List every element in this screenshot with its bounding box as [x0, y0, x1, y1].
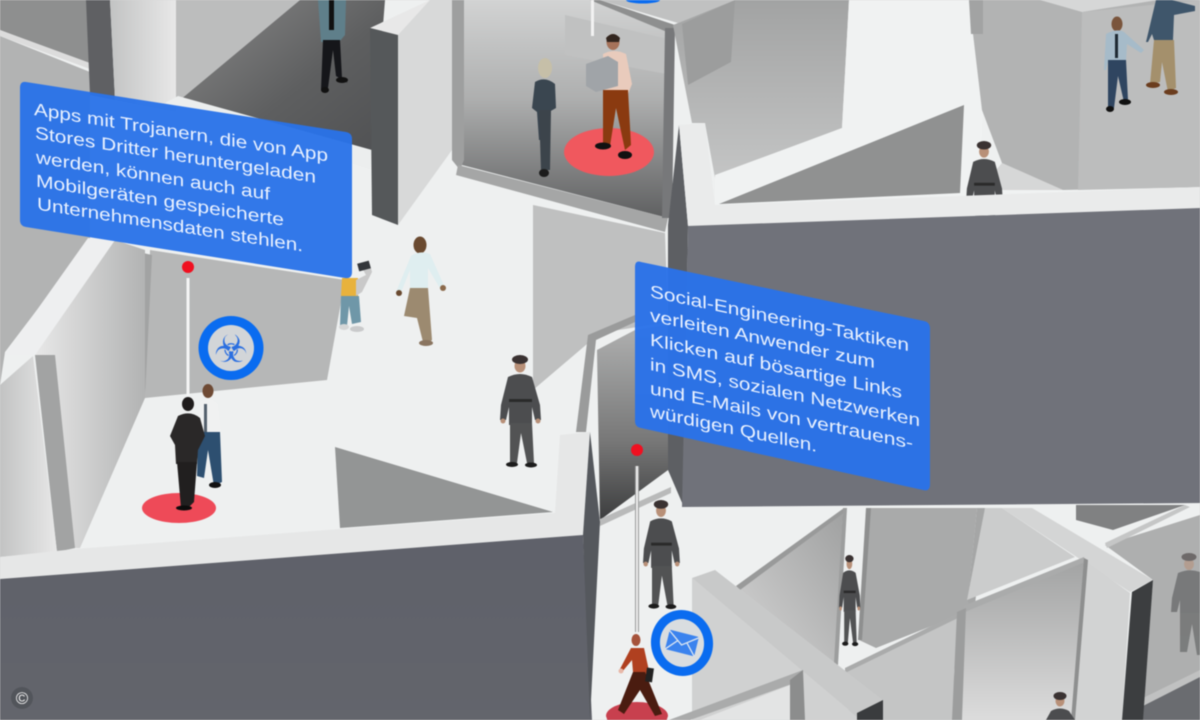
- small room behind callout: [533, 205, 671, 526]
- person: guard in hall: [500, 355, 541, 468]
- callout text: social engineering: Social-Engineering-Taktiken: [650, 281, 909, 355]
- person: walking man: [396, 236, 446, 346]
- copyright mark: [11, 687, 33, 709]
- callout text: malicious apps: [34, 99, 328, 256]
- floor shadow triangle: [335, 447, 553, 528]
- pin line: top: [591, 0, 594, 36]
- icon: envelope: [646, 605, 718, 681]
- upper centre wall and pathway: [673, 0, 1200, 215]
- person: guard behind wall: [966, 141, 1003, 248]
- copyright mark: ©: [16, 689, 29, 708]
- person: blonde woman: [532, 58, 556, 177]
- callout text: social engineering: und E-Mails von vertrauens-: [650, 378, 913, 453]
- upper right room: [969, 0, 1200, 190]
- lower right maze of walls: [669, 505, 1200, 720]
- wall: upper right dark wall: [668, 123, 1200, 507]
- person: man in white shirt: [197, 384, 222, 488]
- wall: lower left dark wall: [0, 432, 600, 720]
- callout text: malicious apps: Mobilgeräten gespeicherte: [36, 171, 284, 230]
- callout text: social engineering: Klicken auf bösartige Links: [650, 330, 902, 402]
- person: man pointing: [1146, 0, 1195, 95]
- person: man with red jacket: [618, 634, 662, 716]
- biohazard room wall: [130, 250, 345, 398]
- person: guard near door: [643, 500, 680, 609]
- callout text: malicious apps: Unternehmensdaten stehlen.: [37, 194, 303, 256]
- person: man in light blue shirt: [1104, 16, 1144, 112]
- pin: malware marker: [182, 261, 194, 396]
- callout text: malicious apps: Apps mit Trojanern, die von App: [34, 99, 328, 165]
- callout text: social engineering: [649, 281, 920, 456]
- person: man in black suit: [170, 397, 205, 510]
- left partition walls: [0, 238, 145, 557]
- building scene: upper left rooms: [0, 0, 452, 385]
- room with red marker: [452, 0, 735, 232]
- red marker: lower left: [142, 493, 216, 523]
- person: man carrying box: [586, 34, 632, 159]
- callout text: malicious apps: Stores Dritter heruntergeladen: [35, 123, 316, 187]
- callout text: social engineering: in SMS, sozialen Netzwerken: [650, 354, 920, 430]
- callout: malicious apps: [20, 82, 352, 278]
- callout: social engineering: [635, 262, 930, 490]
- person: man in teal shirt: [318, 0, 348, 93]
- icon: biohazard: ☣: [214, 327, 248, 371]
- pin: phishing marker: [631, 444, 643, 632]
- callout text: social engineering: verleiten Anwender zum: [650, 305, 875, 372]
- person: faded guard behind glass: [1171, 553, 1200, 655]
- person: guard at bottom: [1046, 692, 1075, 720]
- person: guard in corridor: [839, 555, 860, 646]
- red marker: lower centre: [606, 702, 668, 720]
- red marker: upper room: [564, 128, 654, 176]
- callout text: malicious apps: werden, können auch auf: [35, 147, 270, 204]
- icon: biohazard: [198, 316, 264, 380]
- icon: top cut-off circle: [626, 0, 660, 4]
- callout text: social engineering: würdigen Quellen.: [649, 401, 817, 456]
- person: man in yellow shirt: [339, 261, 372, 332]
